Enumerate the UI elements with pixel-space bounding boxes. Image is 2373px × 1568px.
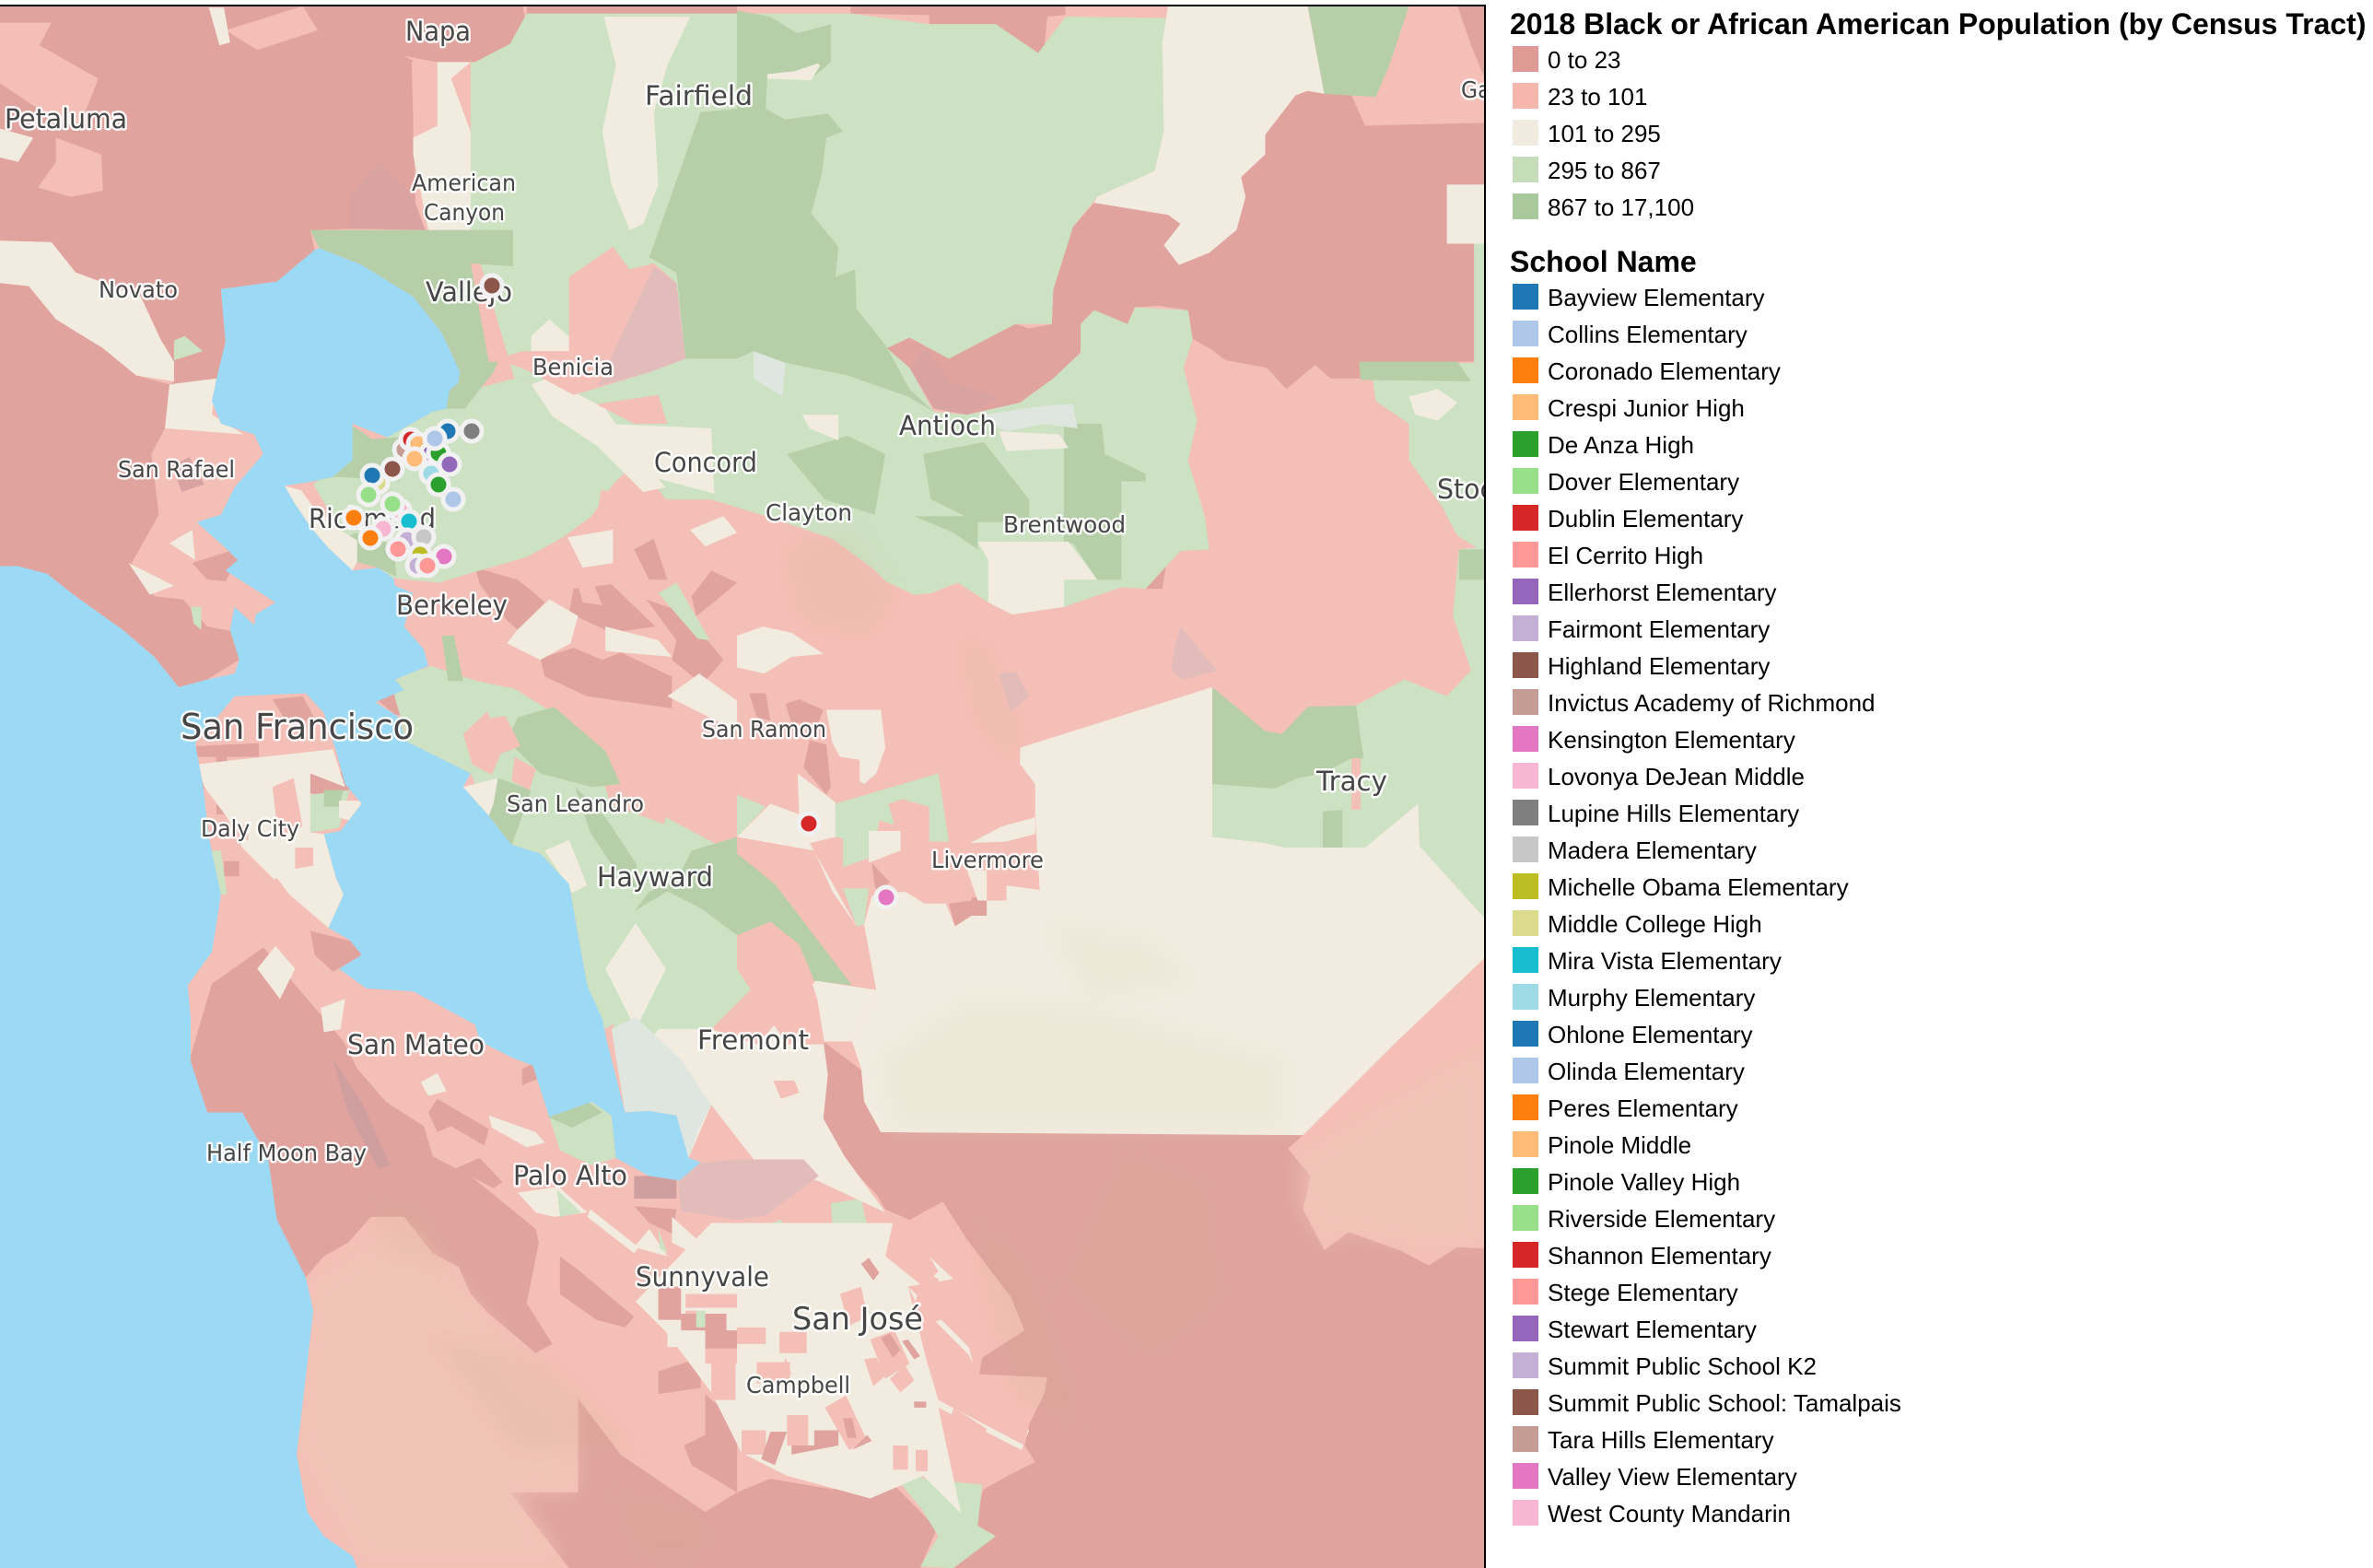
- legend item: Ellerhorst Elementary: [1548, 579, 1777, 606]
- legend item: Stege Elementary: [1548, 1279, 1738, 1306]
- city labels: [5, 16, 1552, 1398]
- legend item: 867 to 17,100: [1548, 193, 1694, 221]
- legend item: Dover Elementary: [1548, 468, 1739, 496]
- mid green: [310, 6, 1485, 1128]
- label: Clayton: Clayton: [766, 499, 852, 526]
- legend item: Crespi Junior High: [1548, 394, 1745, 422]
- label: San José: San José: [792, 1301, 923, 1338]
- legend item: Fairmont Elementary: [1548, 615, 1770, 643]
- legend item: Summit Public School K2: [1548, 1352, 1817, 1380]
- legend item: Lupine Hills Elementary: [1548, 800, 1799, 827]
- label: San Francisco: San Francisco: [181, 707, 414, 747]
- label: Campbell: Campbell: [746, 1372, 850, 1398]
- legend item: Collins Elementary: [1548, 321, 1748, 348]
- label: Half Moon Bay: Half Moon Bay: [206, 1140, 367, 1166]
- label: Fairfield: Fairfield: [645, 80, 753, 111]
- label: Brentwood: Brentwood: [1003, 511, 1126, 538]
- label: Canyon: Canyon: [424, 199, 505, 226]
- legend item: 295 to 867: [1548, 157, 1661, 184]
- legend item: Invictus Academy of Richmond: [1548, 689, 1876, 717]
- legend item: Kensington Elementary: [1548, 726, 1795, 754]
- legend item: Stewart Elementary: [1548, 1316, 1757, 1343]
- label: Novato: Novato: [99, 276, 178, 303]
- label: Antioch: Antioch: [899, 410, 996, 441]
- label: Galt: Galt: [1461, 76, 1505, 103]
- label: Stockton: Stockton: [1437, 474, 1552, 505]
- legend title: school name: School Name: [1510, 245, 1697, 278]
- legend item: Pinole Valley High: [1548, 1168, 1740, 1196]
- legend item: Riverside Elementary: [1548, 1205, 1775, 1233]
- legend item: 101 to 295: [1548, 120, 1661, 147]
- label: Benicia: Benicia: [532, 354, 614, 380]
- label: Napa: Napa: [405, 16, 471, 47]
- legend item: Shannon Elementary: [1548, 1242, 1771, 1270]
- label: Petaluma: Petaluma: [5, 103, 127, 135]
- legend item: 0 to 23: [1548, 46, 1621, 74]
- legend item: Pinole Middle: [1548, 1131, 1691, 1159]
- legend item: West County Mandarin: [1548, 1500, 1791, 1527]
- legend title: population: 2018 Black or African American Population (by Census Tract): [1510, 7, 2366, 41]
- dark tiles in the south bay: [273, 696, 926, 1465]
- cream tracts: [197, 5, 1488, 1514]
- label: Daly City: Daly City: [201, 815, 299, 842]
- legend item: Ohlone Elementary: [1548, 1021, 1753, 1048]
- legend item: Lovonya DeJean Middle: [1548, 763, 1805, 790]
- legend item: Madera Elementary: [1548, 837, 1757, 864]
- label: Richmond: Richmond: [309, 503, 436, 534]
- label: American: American: [412, 170, 516, 196]
- legend item: Dublin Elementary: [1548, 505, 1743, 532]
- label: Concord: Concord: [654, 447, 757, 478]
- legend: school name: [1510, 245, 1901, 1527]
- school location markers: [344, 275, 896, 907]
- hillshade texture: [311, 1163, 1351, 1548]
- census tract choropleth: [0, 0, 1490, 1568]
- label: Tracy: Tracy: [1315, 766, 1387, 797]
- legend item: Coronado Elementary: [1548, 357, 1781, 385]
- legend item: Mira Vista Elementary: [1548, 947, 1782, 975]
- legend item: Valley View Elementary: [1548, 1463, 1797, 1491]
- label: Berkeley: Berkeley: [396, 590, 508, 621]
- map border: [0, 6, 1485, 1568]
- legend item: Murphy Elementary: [1548, 984, 1755, 1012]
- legend item: Tara Hills Elementary: [1548, 1426, 1774, 1454]
- legend item: Peres Elementary: [1548, 1094, 1738, 1122]
- legend item: Olinda Elementary: [1548, 1058, 1745, 1085]
- label: San Leandro: San Leandro: [507, 790, 644, 817]
- legend item: El Cerrito High: [1548, 542, 1703, 569]
- label: San Ramon: San Ramon: [702, 716, 826, 743]
- pink tiles over cream and green: [227, 247, 1361, 1471]
- label: San Rafael: San Rafael: [118, 456, 235, 483]
- label: Palo Alto: Palo Alto: [513, 1160, 627, 1191]
- label: Vallejo: Vallejo: [426, 276, 512, 308]
- legend item: Summit Public School: Tamalpais: [1548, 1389, 1901, 1417]
- light green base: [174, 6, 1488, 1568]
- legend item: De Anza High: [1548, 431, 1694, 459]
- legend item: [1513, 46, 1621, 74]
- label: Sunnyvale: Sunnyvale: [636, 1261, 769, 1293]
- panel: map: [0, 0, 1552, 1568]
- legend item: Highland Elementary: [1548, 652, 1770, 680]
- legend item: Michelle Obama Elementary: [1548, 873, 1849, 901]
- label: Livermore: Livermore: [931, 847, 1044, 873]
- label: San Mateo: San Mateo: [347, 1029, 485, 1060]
- legend item: Middle College High: [1548, 910, 1762, 938]
- label: Fremont: Fremont: [697, 1024, 809, 1056]
- legend item: 23 to 101: [1548, 83, 1647, 111]
- label: Hayward: Hayward: [597, 861, 713, 893]
- legend item: Bayview Elementary: [1548, 284, 1765, 311]
- legend: population: [1510, 7, 2366, 221]
